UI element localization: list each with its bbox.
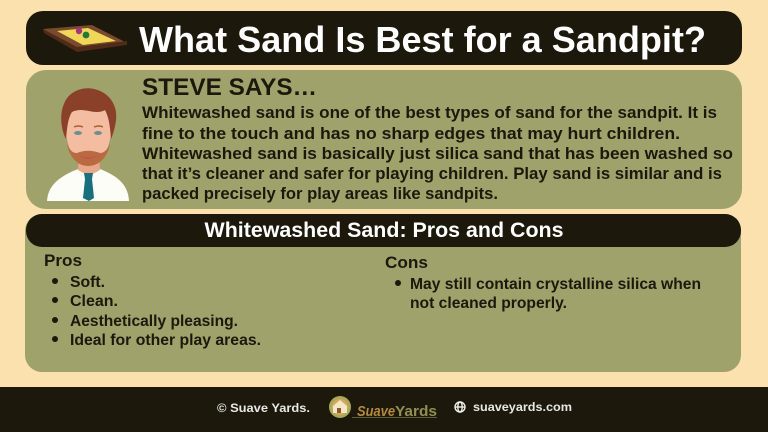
logo: Suave — [357, 403, 395, 420]
pros list: Soft. — [70, 274, 105, 291]
pros list: Ideal for other play areas. — [70, 332, 261, 349]
cons list — [385, 253, 701, 312]
pros list: Aesthetically pleasing. — [70, 313, 238, 330]
pros list — [44, 251, 261, 349]
title banner — [26, 11, 742, 65]
text block: Steve says body — [142, 103, 733, 203]
panel: pros and cons — [25, 214, 741, 372]
icon: sandpit — [43, 25, 127, 52]
footer — [0, 387, 768, 432]
heading bar: Whitewashed Sand: Pros and Cons — [204, 219, 564, 242]
pros list: Pros — [44, 251, 82, 270]
heading: Steve says: STEVE SAYS… — [142, 74, 317, 101]
copyright: © Suave Yards. — [217, 401, 310, 415]
text block: Steve says body: that it’s cleaner and safer for playing children. Play sand is similar and is — [142, 164, 722, 183]
text block: Steve says body: packed precisely for play areas like sandpits. — [142, 184, 498, 203]
title text: What Sand Is Best for a Sandpit? — [139, 19, 706, 60]
icon: Steve avatar — [47, 88, 129, 201]
text block: Steve says body: Whitewashed sand is one of the best types of sand for the sandpit. It is — [142, 103, 717, 122]
icon: globe — [455, 402, 465, 412]
cons list: May still contain crystalline silica when — [410, 276, 701, 293]
website: suaveyards.com — [473, 400, 572, 414]
heading bar — [26, 214, 741, 247]
logo — [329, 396, 437, 420]
pros list: Clean. — [70, 293, 118, 310]
panel: Steve says — [26, 70, 742, 209]
cons list: not cleaned properly. — [410, 295, 567, 312]
cons list: Cons — [385, 253, 428, 272]
text block: Steve says body: fine to the touch and has no sharp edges that may hurt children. — [142, 124, 680, 143]
text block: Steve says body: Whitewashed sand is basically just silica sand that has been washed so — [142, 144, 733, 163]
logo: Yards — [395, 403, 437, 420]
